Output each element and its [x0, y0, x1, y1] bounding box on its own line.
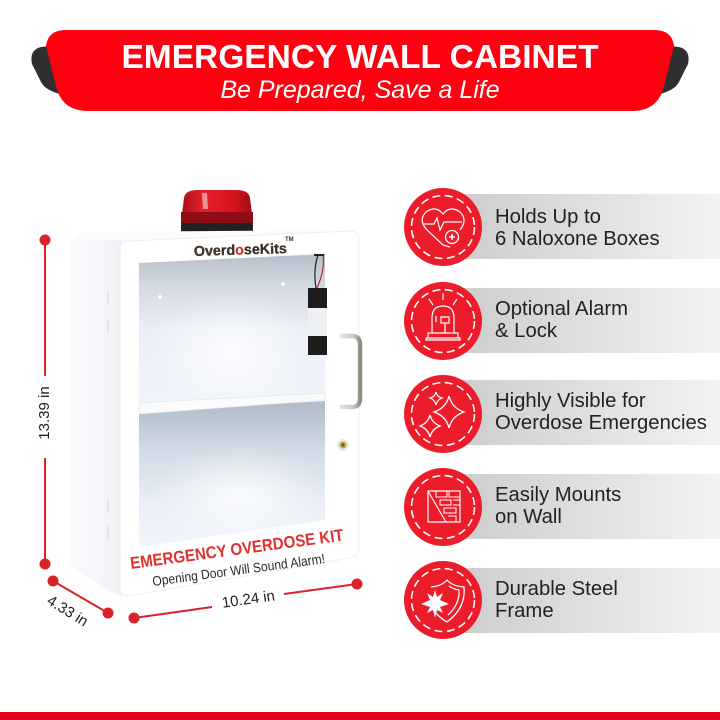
dimension: width: 10.24 in: [221, 587, 276, 612]
icon: heart: [404, 188, 482, 266]
dimension: width: [128, 578, 362, 624]
brand logo: OverdoseKits: [194, 241, 287, 260]
shelf: [139, 393, 325, 414]
mounting holes: [158, 282, 285, 299]
feature: durable steel frame: [404, 561, 720, 639]
dimension: height: 13.39 in: [36, 386, 53, 440]
window upper: [139, 254, 325, 403]
cabinet label red: EMERGENCY OVERDOSE KIT: [129, 526, 345, 573]
feature text: on Wall: [495, 506, 562, 528]
alarm beacon: [181, 190, 253, 233]
bottom red strip: [0, 712, 720, 720]
banner red ribbon: [46, 30, 674, 111]
icon: brick wall: [404, 468, 482, 546]
feature: holds up to 6 boxes: [404, 188, 720, 266]
cabinet product photo: [70, 190, 360, 596]
header banner: [31, 30, 689, 111]
feature text: 6 Naloxone Boxes: [495, 228, 660, 250]
dimension: height: [36, 234, 53, 570]
feature: optional alarm and lock: [404, 282, 720, 360]
feature text: Durable Steel: [495, 578, 618, 600]
feature text: Highly Visible for: [495, 390, 646, 412]
cabinet top surface: [70, 230, 350, 241]
alarm sensor: [308, 254, 327, 355]
icon: sparkles: [404, 375, 482, 453]
title: EMERGENCY WALL CABINET: [121, 39, 599, 76]
feature text: Frame: [495, 600, 554, 622]
dimension: depth: [44, 576, 114, 630]
door handle: [340, 336, 360, 407]
grey bar: [443, 380, 720, 445]
door lock: [337, 439, 349, 451]
banner left wing: [31, 46, 60, 94]
grey bar: [443, 194, 720, 259]
subtitle: Be Prepared, Save a Life: [220, 76, 500, 104]
brand logo: TM: [285, 237, 294, 243]
feature text: Overdose Emergencies: [495, 412, 707, 434]
grey bar: [443, 288, 720, 353]
feature text: Optional Alarm: [495, 298, 628, 320]
feature text: & Lock: [495, 320, 558, 342]
feature: highly visible: [404, 375, 720, 453]
dimension: depth: 4.33 in: [44, 592, 91, 630]
feature text: Easily Mounts: [495, 484, 621, 506]
banner right wing: [660, 46, 689, 94]
icon: shield: [404, 561, 482, 639]
icon: siren: [404, 282, 482, 360]
cabinet front face: [120, 231, 359, 596]
grey bar: [443, 474, 720, 539]
cabinet label black: Opening Door Will Sound Alarm!: [151, 551, 326, 589]
feature: easily mounts: [404, 468, 720, 546]
cabinet side: [70, 240, 122, 596]
feature text: Holds Up to: [495, 206, 601, 228]
grey bar: [443, 568, 720, 633]
hinges: [107, 290, 109, 540]
window lower: [139, 401, 325, 547]
